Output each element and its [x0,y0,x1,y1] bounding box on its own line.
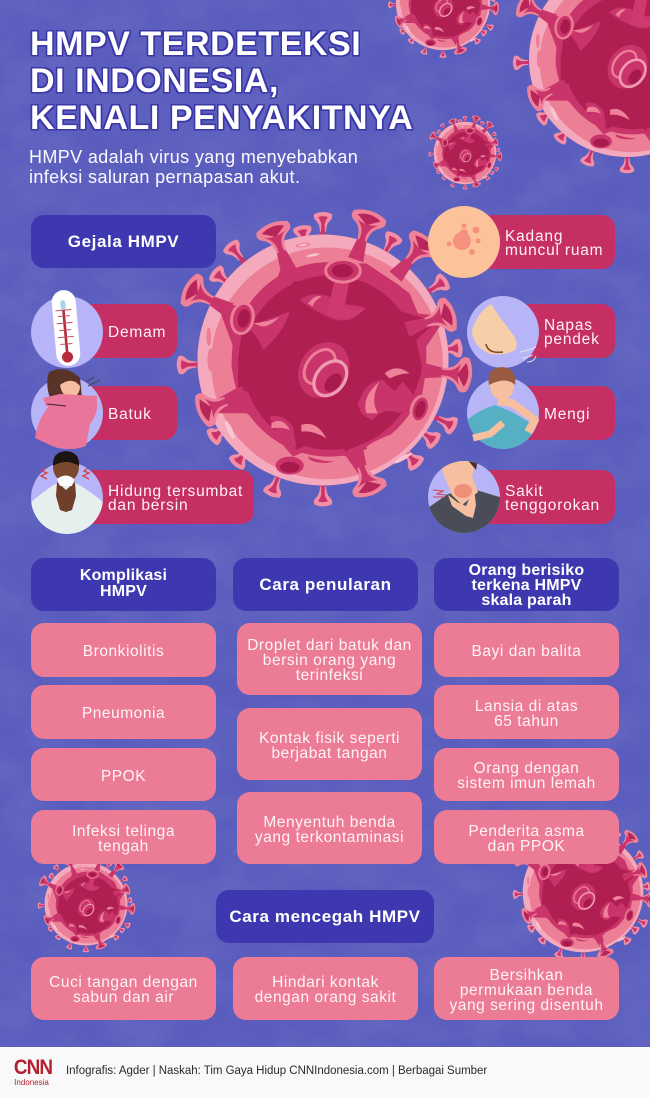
card: Bronkiolitis: Bronkiolitis [83,643,164,660]
card: Cuci tangan: sabun dan air [73,989,174,1006]
card: Hindari kontak [233,957,418,1020]
symptom label: Kadang muncul ruam: muncul ruam [505,242,603,259]
symptom label: Mengi: Mengi [544,406,590,423]
heading: Gejala HMPV [31,215,216,268]
card: Droplet: Droplet dari batuk dan [247,637,412,654]
card: Kontak fisik: berjabat tangan [272,745,387,762]
symptom label: Napas pendek: pendek [544,331,600,348]
virus: small beside title [428,115,503,189]
card: Menyentuh benda: Menyentuh benda [263,814,396,831]
card: Bersihkan: Bersihkan [490,967,563,984]
icon: skin rash [428,206,500,278]
card: Lansia [434,685,619,739]
icon: man with sore throat [428,461,500,533]
card: Lansia: Lansia di atas [475,698,578,715]
card: Bersihkan: yang sering disentuh [449,997,604,1014]
icon: man sneezing [31,451,103,534]
card: Cuci tangan: Cuci tangan dengan [49,974,198,991]
card: Sistem imun lemah: Orang dengan [474,760,579,777]
title: KENALI PENYAKITNYA [30,99,413,137]
card: Bersihkan: permukaan benda [460,982,593,999]
card: Penderita asma [434,810,619,864]
symptom label: Hidung tersumbat dan bersin [75,470,254,524]
credits: Infografis: Agder | Naskah: Tim Gaya Hidup CNNIndonesia.com | Berbagai Sumber [66,1065,487,1077]
column heading: Orang berisiko: Orang berisiko [469,562,584,579]
card: Penderita asma: dan PPOK [488,838,565,855]
card: Infeksi telinga tengah: Infeksi telinga [72,823,175,840]
card: Sistem imun lemah: sistem imun lemah [457,775,596,792]
card: Droplet: terinfeksi [296,667,363,684]
symptom label: Napas pendek: Napas [544,316,593,334]
CNN Indonesia logo: CNN [14,1056,52,1079]
card: Hindari kontak: dengan orang sakit [255,989,396,1006]
title [30,25,414,137]
card: Kontak fisik [237,708,422,780]
card: Bayi dan balita [434,623,619,677]
column heading: Orang berisiko: skala parah [481,592,572,609]
subtitle: infeksi saluran pernapasan akut. [29,166,300,186]
card: Pneumonia [31,685,216,739]
subtitle [29,147,358,187]
symptom label: Hidung tersumbat dan bersin: Hidung tersumbat [108,482,243,500]
card: Penderita asma: Penderita asma [468,823,585,840]
column heading: Komplikasi HMPV: Komplikasi [80,567,167,584]
column heading: Cara penularan: Cara penularan [259,574,392,594]
virus: bottom left [38,853,136,952]
card: Droplet: bersin orang yang [263,652,396,669]
card: Lansia: 65 tahun [494,713,559,730]
column heading: Orang berisiko [434,558,619,611]
symptom label: Napas pendek [515,304,615,358]
CNN Indonesia logo: Indonesia [14,1078,49,1087]
footer [0,1047,650,1098]
card: Menyentuh benda [237,792,422,864]
symptom label: Hidung tersumbat dan bersin: dan bersin [108,497,188,514]
card: PPOK: PPOK [101,768,146,785]
card: Cuci tangan [31,957,216,1020]
card: Bersihkan [434,957,619,1020]
symptom label: Demam [75,304,177,358]
card: Infeksi telinga tengah: tengah [98,838,149,855]
heading: Cara mencegah HMPV [216,890,434,943]
card: Pneumonia: Pneumonia [82,705,165,722]
title: DI INDONESIA, [30,62,279,100]
subtitle: HMPV adalah virus yang menyebabkan [29,147,358,167]
card: Infeksi telinga tengah [31,810,216,864]
heading: Gejala HMPV: Gejala HMPV [68,232,179,250]
icon: man wheezing [467,367,539,449]
symptom label: Sakit tenggorokan [475,470,615,524]
card: Hindari kontak: Hindari kontak [272,974,379,991]
symptom label: Demam: Demam [108,324,166,341]
symptom label: Batuk: Batuk [108,406,152,423]
icon: thermometer [31,290,103,368]
card: Sistem imun lemah [434,748,619,801]
column heading: Komplikasi HMPV [31,558,216,611]
icon: nose [467,296,539,368]
heading: Cara mencegah HMPV: Cara mencegah HMPV [229,906,421,926]
column heading: Komplikasi HMPV: HMPV [100,583,147,600]
virus: top right [513,0,650,173]
card: Droplet [237,623,422,695]
symptom label: Sakit tenggorokan: Sakit [505,482,543,500]
column heading: Cara penularan [233,558,418,611]
symptom label: Batuk [75,386,177,440]
icon: person coughing [31,369,103,449]
card: Kontak fisik: Kontak fisik seperti [259,730,400,747]
column heading: Orang berisiko: terkena HMPV [471,577,581,594]
card: PPOK [31,748,216,801]
virus: top centre [388,0,500,58]
card: Menyentuh benda: yang terkontaminasi [255,829,404,846]
virus: bottom right [513,818,650,962]
card: Bayi dan balita: Bayi dan balita [472,643,581,660]
symptom label: Kadang muncul ruam [475,215,615,269]
card: Bronkiolitis [31,623,216,677]
symptom label: Mengi [515,386,615,440]
symptom label: Sakit tenggorokan: tenggorokan [505,497,600,514]
symptom label: Kadang muncul ruam: Kadang [505,228,563,244]
title: HMPV TERDETEKSI [30,25,361,63]
virus: large centre [176,206,474,506]
